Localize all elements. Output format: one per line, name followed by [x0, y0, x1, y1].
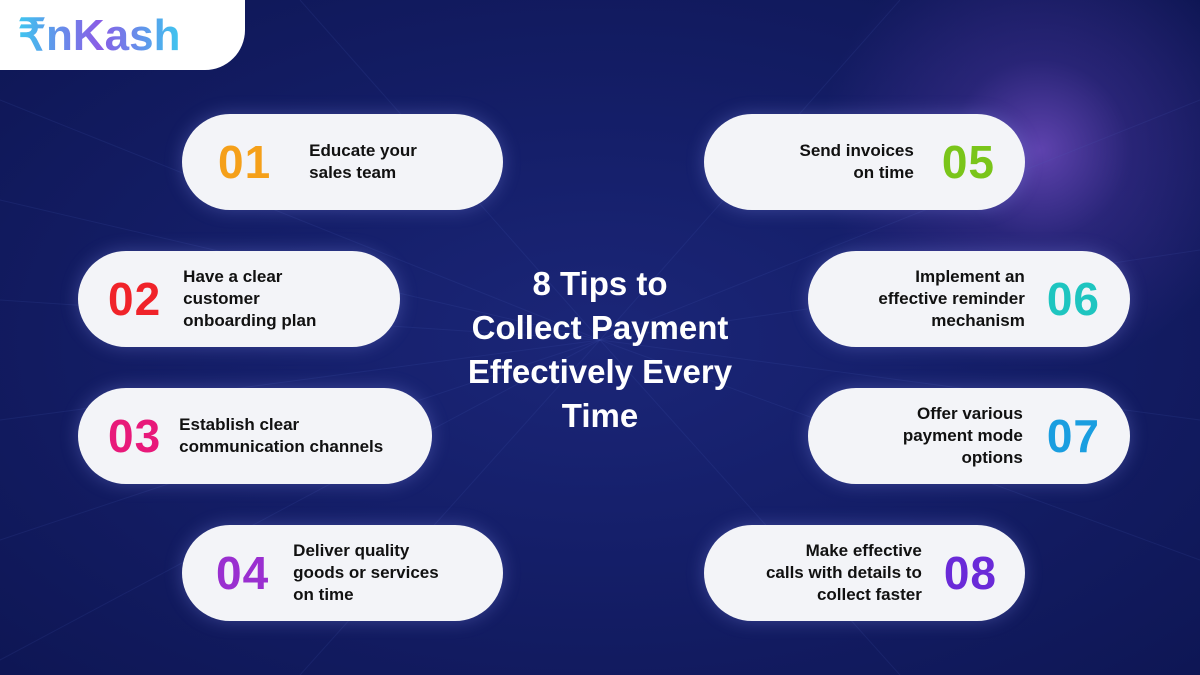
- tip 08: [704, 525, 1025, 621]
- tip 08: Make effective: [806, 541, 922, 560]
- tip 04: Deliver quality: [293, 541, 409, 560]
- tip 07: payment mode: [903, 426, 1023, 445]
- tip 02: customer: [183, 289, 260, 308]
- tip 05: 05: [942, 136, 995, 188]
- title: Time: [562, 397, 638, 434]
- tip 01: Educate your: [309, 141, 417, 160]
- tip 02: 02: [108, 273, 161, 325]
- tip 07: Offer various: [917, 404, 1023, 423]
- tip 08: 08: [944, 547, 997, 599]
- tip 05: Send invoices: [800, 141, 914, 160]
- tip 06: effective reminder: [878, 289, 1025, 308]
- title: 8 Tips to: [532, 265, 668, 302]
- tip 02: Have a clear: [183, 267, 282, 286]
- tip 03: Establish clear: [179, 415, 299, 434]
- tip 02: [78, 251, 400, 347]
- tip 01: [182, 114, 503, 210]
- tip 04: goods or services: [293, 563, 439, 582]
- logo: [0, 0, 245, 70]
- tip 04: 04: [216, 547, 269, 599]
- tip 04: on time: [293, 585, 354, 604]
- tip 06: mechanism: [931, 311, 1025, 330]
- title: Effectively Every: [468, 353, 732, 390]
- tip 01: 01: [218, 136, 271, 188]
- tip 02: onboarding plan: [183, 311, 316, 330]
- title: Collect Payment: [472, 309, 728, 346]
- tip 06: [808, 251, 1130, 347]
- tip 06: 06: [1047, 273, 1100, 325]
- tip 03: communication channels: [179, 437, 383, 456]
- tip 03: 03: [108, 410, 161, 462]
- logo: ₹nKash: [18, 10, 180, 60]
- tip 01: sales team: [309, 163, 396, 182]
- tip 08: calls with details to: [766, 563, 922, 582]
- tip 07: [808, 388, 1130, 484]
- tip 07: options: [961, 448, 1023, 467]
- tip 05: [704, 114, 1025, 210]
- tip 04: [182, 525, 503, 621]
- tip 08: collect faster: [817, 585, 922, 604]
- tip 05: on time: [853, 163, 914, 182]
- title: [468, 265, 732, 434]
- tip 06: Implement an: [915, 267, 1025, 286]
- tip 07: 07: [1047, 410, 1100, 462]
- tip 03: [78, 388, 432, 484]
